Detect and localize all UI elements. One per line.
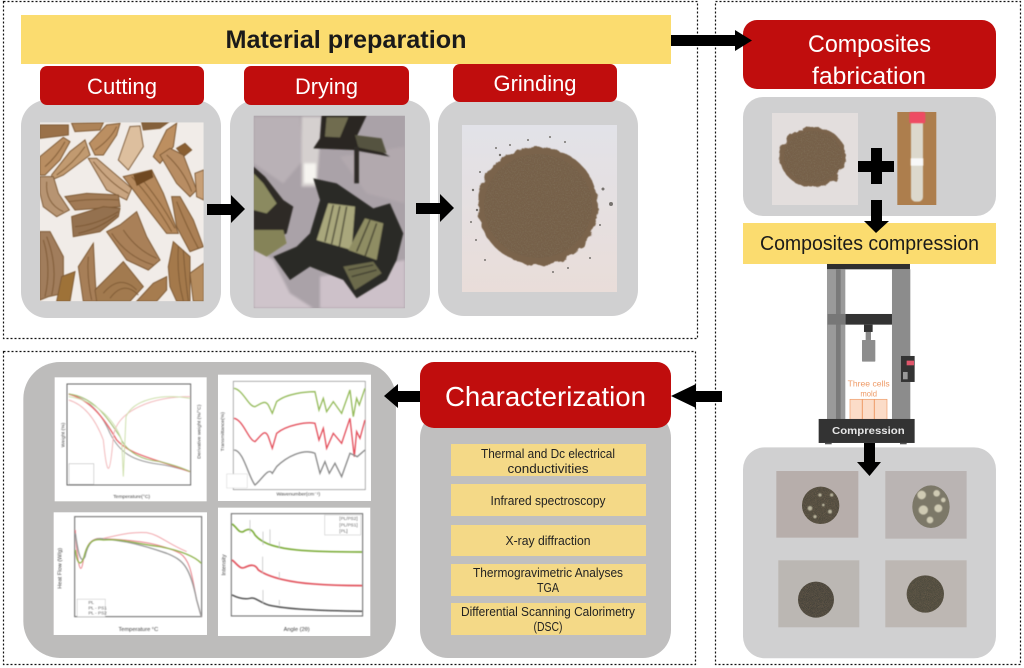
- heading: Characterization: Characterization: [445, 381, 646, 412]
- chart: DSC heat flow: PL - PS1: [88, 605, 107, 610]
- chart: DSC heat flow: [54, 512, 207, 635]
- chart: XRD patterns: [PL/PS2]: [339, 516, 358, 521]
- compression machine: [819, 264, 915, 444]
- chart: DSC heat flow: PL - PS2: [88, 611, 107, 616]
- arrow: preparation to fabrication: [671, 30, 752, 51]
- chart: XRD patterns: Intensity: [221, 554, 227, 576]
- arrow: cutting to drying: [207, 195, 245, 223]
- method: TGA: TGA: [537, 580, 559, 595]
- label: Cutting: Cutting: [87, 74, 157, 99]
- method: X-ray diffraction: X-ray diffraction: [506, 533, 590, 548]
- panel: characterization methods: [420, 410, 671, 658]
- chart: DSC heat flow: Temperature °C: [118, 627, 158, 633]
- method: thermal and DC conductivities: Thermal and Dc electrical: [481, 446, 615, 461]
- chart: XRD patterns: [PL]: [339, 529, 348, 534]
- photo: dried banana slices: [254, 116, 405, 308]
- label: Grinding: Grinding: [494, 71, 576, 96]
- method: DSC: (DSC): [534, 619, 562, 634]
- heading: Composites fabrication: Composites: [808, 31, 931, 58]
- chart: XRD patterns: Angle (2θ): [284, 627, 310, 633]
- panel frame: material preparation: [4, 2, 698, 338]
- arrow: mix to compression: [864, 200, 889, 233]
- chart: TGA weight curves: Weight (%): [60, 422, 66, 447]
- heading: Composites compression: Composites compression: [760, 233, 979, 255]
- icon: plus: [858, 148, 894, 184]
- heading: Characterization: [420, 362, 671, 428]
- method: infrared spectroscopy: Infrared spectroscopy: [490, 493, 606, 508]
- arrow: machine to characterization: [671, 384, 722, 408]
- chart: XRD patterns: [218, 508, 370, 636]
- chart: FTIR spectra: Wavenumber(cm⁻¹): [276, 491, 320, 497]
- chart: TGA weight curves: [55, 377, 207, 501]
- chart: FTIR spectra: Transmittance(%): [220, 412, 226, 451]
- panel frame: composites fabrication: [716, 2, 1020, 664]
- label: Drying: Drying: [295, 74, 358, 99]
- method: TGA: [451, 564, 646, 596]
- photo: ground powder: [462, 125, 617, 292]
- panel: results charts: [23, 362, 396, 658]
- chart: XRD patterns: [PL/PS1]: [339, 523, 358, 528]
- photo: cut banana slices: [40, 122, 204, 301]
- photo: test tube: [897, 112, 936, 205]
- panel: drying: [230, 100, 430, 318]
- label: Drying: [244, 66, 409, 105]
- method: TGA: Thermogravimetric Analyses: [473, 565, 623, 580]
- method: DSC: Differential Scanning Calorimetry: [461, 604, 635, 619]
- photo: powder: [772, 113, 858, 205]
- method: thermal and DC conductivities: conductivities: [508, 461, 589, 476]
- compression machine: mold: [860, 389, 877, 398]
- method: infrared spectroscopy: [451, 484, 646, 516]
- heading: Material preparation: Material preparation: [226, 26, 466, 54]
- arrow: machine to samples: [857, 443, 881, 476]
- heading: Composites fabrication: [743, 20, 996, 90]
- chart: DSC heat flow: PL: [88, 600, 94, 605]
- heading: Composites fabrication: fabrication: [812, 63, 926, 90]
- panel: grinding: [438, 100, 638, 316]
- arrow: drying to grinding: [416, 194, 454, 222]
- method: X-ray diffraction: [451, 525, 646, 556]
- method: DSC: [451, 603, 646, 635]
- sample photo 3: [778, 560, 859, 627]
- label: Cutting: [40, 66, 204, 105]
- compression machine: Compression: [832, 426, 905, 437]
- label: Grinding: [453, 64, 617, 102]
- method: thermal and DC conductivities: [451, 444, 646, 476]
- chart: TGA weight curves: Temperature(°C): [113, 494, 150, 500]
- heading: Material preparation: [21, 15, 671, 64]
- arrow: characterization to results: [384, 384, 420, 408]
- panel frame: characterization: [4, 352, 696, 664]
- panel: raw materials mix: [743, 97, 996, 216]
- mold label: Three cells: [848, 380, 890, 389]
- chart: DSC heat flow: Heat Flow (W/g): [57, 548, 63, 589]
- chart: FTIR spectra: [218, 375, 371, 501]
- sample photo 1: [776, 471, 858, 538]
- sample photo 4: [885, 560, 967, 627]
- chart: TGA weight curves: Derivative weight (%/°C): [197, 404, 203, 459]
- panel: pressed composite samples: [743, 447, 996, 658]
- sample photo 2: [885, 471, 967, 539]
- heading: Composites compression: [743, 223, 996, 264]
- panel: cutting: [21, 100, 221, 318]
